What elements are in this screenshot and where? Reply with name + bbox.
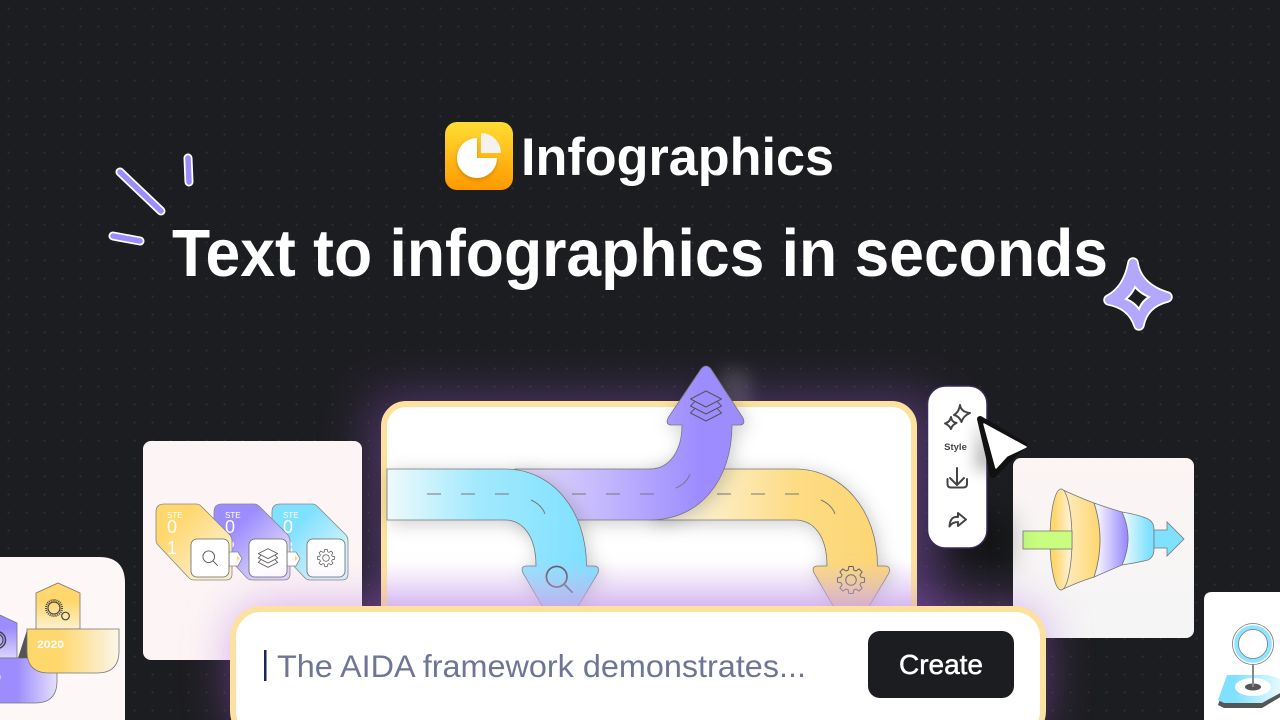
icon: download [948,468,967,488]
icon: share [950,513,966,526]
logo wordmark: Infographics [521,128,834,187]
cursor [980,419,1026,475]
search bar [233,609,1043,720]
accent: sparkle star [1109,263,1167,325]
step 1 card: STE [167,511,183,520]
title: Text to infographics in seconds [172,216,1108,291]
logo icon [445,122,513,190]
panel: step cards [143,441,362,660]
text cursor [264,650,266,681]
step 1 card: 0 [167,517,177,537]
yellow timeline item [27,583,119,673]
panel: main preview [384,366,914,704]
pin map icon [1218,624,1280,708]
step 3 card: 3 [283,538,293,558]
step 1 card [156,504,242,580]
step 2 card: 0 [225,517,235,537]
label: style: Style [944,442,967,453]
create button: Create [899,649,983,680]
panel: pin card [1204,592,1280,720]
step 2 card [214,504,300,580]
yellow timeline item: 2020 [37,639,64,651]
panel: funnel card [1013,458,1194,638]
step 3 card: STE [283,511,299,520]
step 2 card: STE [225,511,241,520]
funnel chart [1023,489,1184,590]
create button [868,631,1014,698]
toolbar [926,385,988,549]
step 2 card: 2 [225,538,235,558]
blue arrow [387,469,598,631]
step 3 card: 0 [283,517,293,537]
purple timeline item [0,615,57,703]
step 3 card [272,504,348,580]
accent: spark lines [113,158,189,241]
icon: style sparkle [945,405,970,429]
step 1 card: 1 [167,538,177,558]
yellow arrow [650,469,890,631]
panel: timeline card [0,557,125,720]
prompt text: The AIDA framework demonstrates... [277,648,806,684]
purple arrow [515,366,744,520]
